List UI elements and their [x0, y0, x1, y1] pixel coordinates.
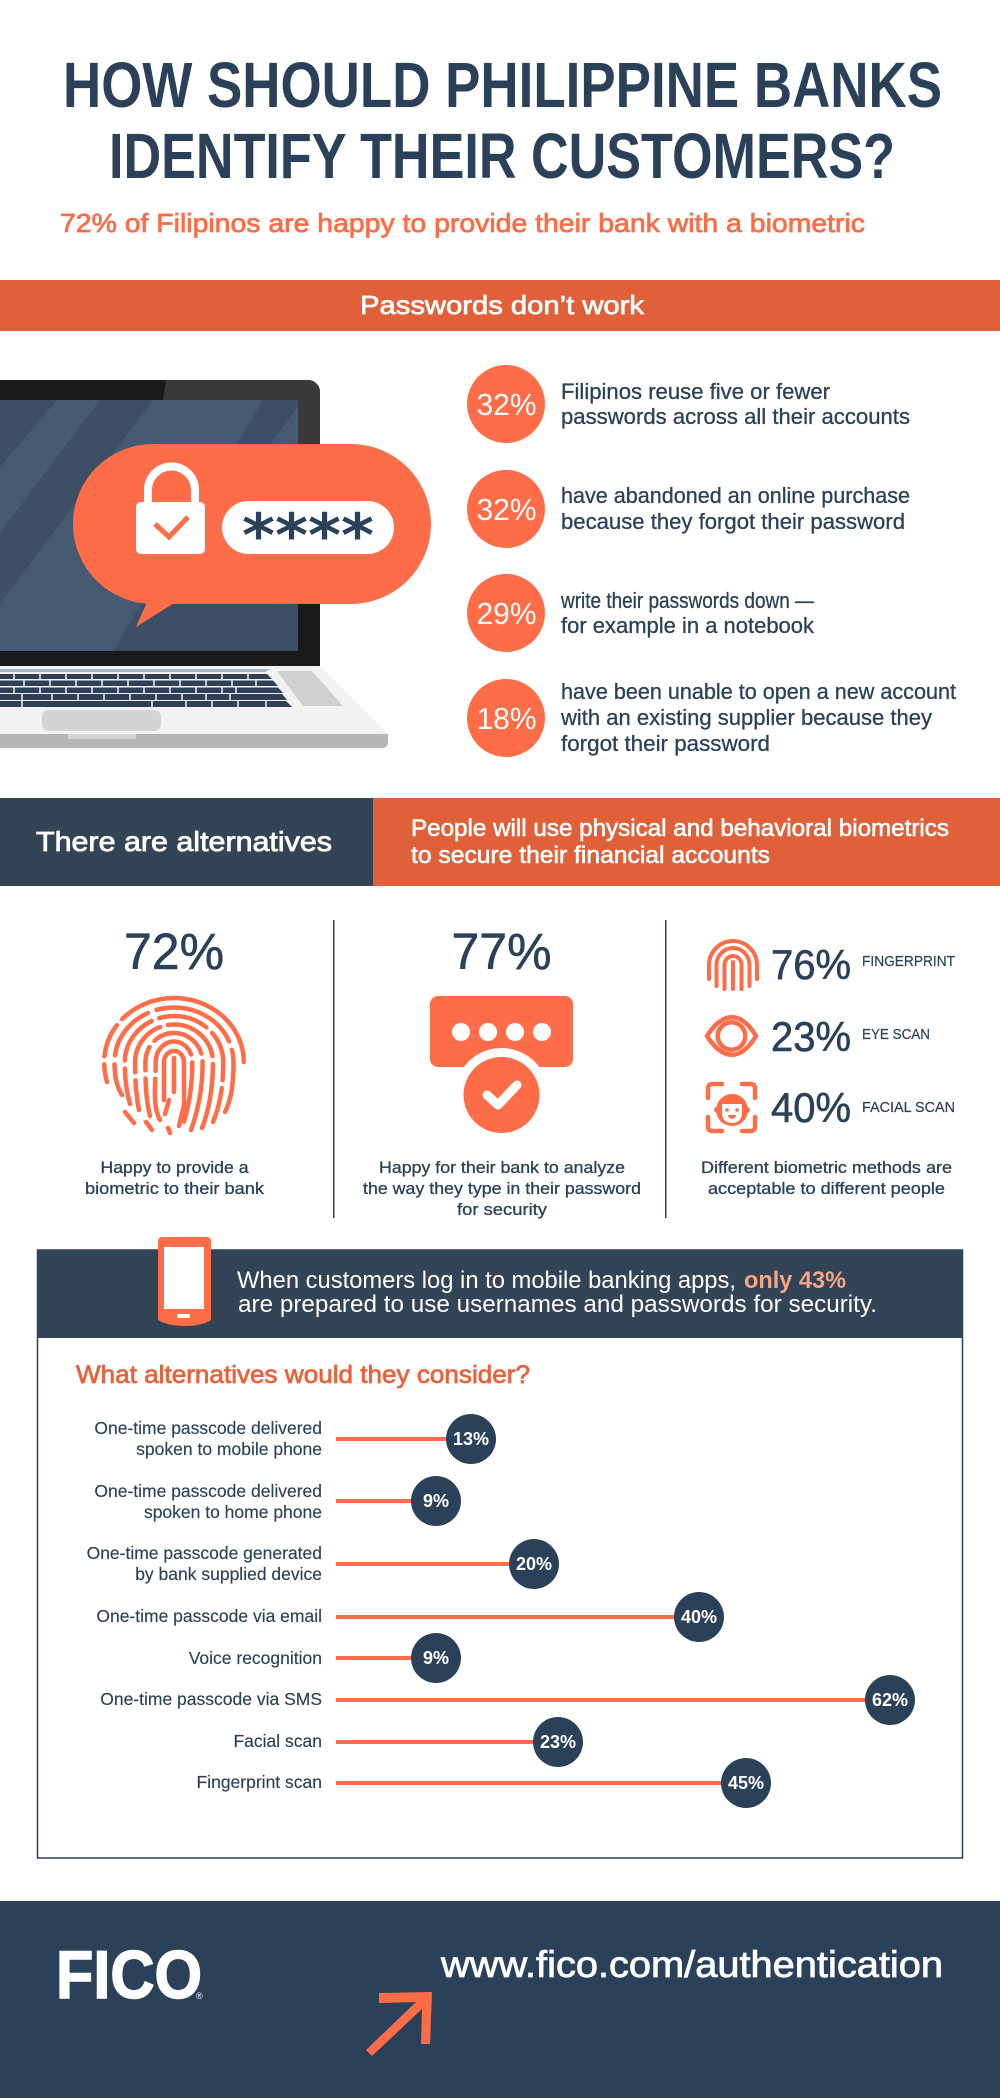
figure: 72% [124, 923, 224, 980]
section banner: there are alternatives: People will use physical and behavioral biometrics [411, 815, 949, 842]
stat: write passwords down: 29% [476, 596, 536, 631]
value labels: 40% [681, 1607, 717, 1627]
panel border [38, 1250, 962, 1858]
stat: facial scan: FACIAL SCAN [862, 1100, 955, 1116]
stat: reuse passwords: passwords across all their accounts [561, 404, 910, 429]
panel: 72% provide a biometric [85, 923, 265, 1198]
row labels: One-time passcode via email [96, 1606, 322, 1626]
stat: facial scan [771, 1084, 955, 1131]
row labels: spoken to mobile phone [136, 1439, 322, 1459]
panel: 77% typing analysis [363, 923, 641, 1219]
icon: small fingerprint [709, 941, 757, 989]
row labels: by bank supplied device [135, 1564, 322, 1584]
mobile banking banner: When customers log in to mobile banking apps, [237, 1267, 736, 1294]
stat: write passwords down: write their passwords down — [560, 588, 814, 613]
website address: www.fico.com/authentication [440, 1944, 943, 1985]
caption: for security [457, 1200, 548, 1219]
section banner: passwords don't work [0, 280, 1000, 331]
stat: unable to open account: with an existing supplier because they [560, 705, 932, 730]
stat: unable to open account: forgot their password [561, 731, 770, 756]
stat: reuse passwords [467, 365, 910, 443]
stat: fingerprint: 76% [771, 941, 851, 988]
value labels [423, 1429, 908, 1793]
icon: eye [707, 1017, 756, 1055]
bars [336, 1437, 890, 1785]
value labels: 20% [516, 1554, 552, 1574]
row labels: One-time passcode delivered [94, 1481, 322, 1501]
lollipop chart [87, 1414, 915, 1808]
value labels: 9% [423, 1648, 449, 1668]
caption [363, 1158, 641, 1219]
caption: Happy for their bank to analyze [379, 1158, 625, 1177]
row labels: spoken to home phone [144, 1502, 322, 1522]
value labels: 62% [872, 1690, 908, 1710]
stat: write passwords down: for example in a notebook [561, 613, 815, 638]
subtitle: 72% of Filipinos are happy to provide their bank with a biometric [60, 208, 865, 238]
stat: eye scan: EYE SCAN [862, 1027, 930, 1043]
chart heading: What alternatives would they consider? [76, 1361, 530, 1389]
stat: abandoned purchase: 32% [476, 492, 536, 527]
FICO logo: ® [196, 1991, 203, 2001]
caption: the way they type in their password [363, 1179, 641, 1198]
speech bubble [73, 444, 431, 627]
row labels: One-time passcode generated [87, 1543, 322, 1563]
stat: facial scan: 40% [771, 1084, 851, 1131]
value markers [411, 1414, 915, 1808]
illustration: laptop with password speech bubble [0, 380, 431, 748]
laptop base and keyboard [0, 666, 388, 748]
row labels: Voice recognition [189, 1648, 322, 1668]
stat: write passwords down [467, 574, 815, 652]
stat: abandoned purchase [467, 470, 910, 548]
stat: eye scan: 23% [771, 1013, 851, 1060]
icon: padlock [136, 466, 205, 554]
row labels: One-time passcode via SMS [100, 1689, 322, 1709]
divider lines [333, 920, 666, 1218]
caption: biometric to their bank [85, 1179, 265, 1198]
icon: mobile phone [158, 1237, 211, 1326]
title [63, 49, 942, 192]
footer [0, 1901, 1000, 2098]
caption: Different biometric methods are [701, 1158, 952, 1177]
value labels: 45% [728, 1773, 764, 1793]
mobile banking banner: only 43% [744, 1267, 846, 1294]
panel: mobile banking alternatives [37, 1237, 963, 1858]
laptop lid [0, 380, 320, 666]
icon: fingerprint [104, 998, 244, 1133]
stat: reuse passwords: Filipinos reuse five or fewer [561, 379, 830, 404]
stat: reuse passwords: 32% [476, 387, 536, 422]
stat: fingerprint: FINGERPRINT [862, 954, 955, 970]
icon: passcode with check [430, 996, 573, 1142]
mobile banking banner: are prepared to use usernames and passwords for security. [238, 1291, 877, 1318]
row labels [87, 1418, 322, 1792]
stat: unable to open account [467, 679, 956, 757]
figure: 77% [452, 923, 552, 980]
FICO logo: FICO [56, 1937, 202, 2013]
row labels: One-time passcode delivered [94, 1418, 322, 1438]
caption: acceptable to different people [708, 1179, 945, 1198]
panel: biometric methods [701, 941, 955, 1198]
stat: unable to open account: 18% [476, 701, 536, 736]
caption: Happy to provide a [100, 1158, 249, 1177]
value labels: 9% [423, 1491, 449, 1511]
row labels: Fingerprint scan [197, 1772, 322, 1792]
caption [85, 1158, 265, 1198]
value labels: 23% [540, 1732, 576, 1752]
password field: **** [242, 501, 374, 571]
stat: abandoned purchase: have abandoned an online purchase [561, 483, 910, 508]
stat: fingerprint [771, 941, 955, 988]
section banner: there are alternatives [0, 798, 1000, 886]
arrow [366, 1992, 432, 2056]
icon: face scan [708, 1084, 755, 1131]
row labels: Facial scan [233, 1731, 322, 1751]
mobile banking banner [37, 1250, 963, 1338]
caption [701, 1158, 952, 1198]
stat: eye scan [771, 1013, 930, 1060]
section banner: there are alternatives: There are alternatives [36, 826, 332, 857]
value labels: 13% [453, 1429, 489, 1449]
section banner: there are alternatives: to secure their financial accounts [411, 842, 770, 869]
stat: unable to open account: have been unable to open a new account [561, 679, 956, 704]
panel: password statistics [467, 365, 956, 757]
section banner: passwords don't work: Passwords don’t work [360, 290, 645, 320]
stat: abandoned purchase: because they forgot their password [561, 509, 905, 534]
